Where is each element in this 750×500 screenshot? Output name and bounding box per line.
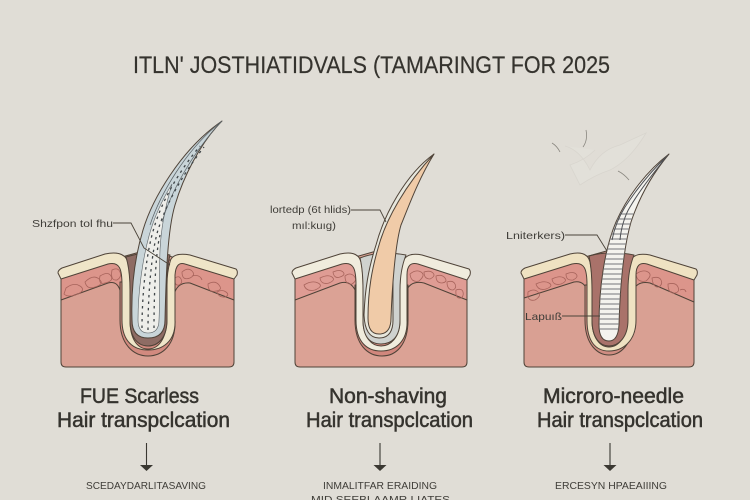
follicle outer ring: [355, 285, 408, 356]
follicle sheath and skin cap: [521, 253, 697, 351]
arrow: micro-needle: [604, 443, 616, 471]
heading: non-shaving: Hair transpclcation: [306, 409, 473, 432]
follicle outer ring: [120, 282, 175, 356]
label: non-shaving callout: [270, 204, 386, 232]
hair core with dots: [138, 121, 222, 333]
follicle sheath and skin cap: [58, 253, 237, 350]
label: upper callout: Lniterkers): [506, 230, 565, 242]
label: non-shaving callout: mıl:kuıg): [292, 220, 336, 232]
hair shaft: [368, 154, 434, 334]
dermis band with cells: [61, 260, 234, 300]
panel: micro-needle diagram: [506, 130, 697, 367]
label: lower callout: Lapuıß: [525, 311, 562, 323]
heading: FUE: Hair transpclcation: [57, 409, 230, 432]
label: FUE callout: Shzfpon tol fhu: [32, 218, 113, 230]
heading: non-shaving: [306, 385, 473, 432]
hair shaft: [599, 154, 669, 341]
skin block: [524, 250, 694, 367]
faint sketch: [552, 130, 646, 185]
text: non-shaving benefit: INMALITFAR ERAIDING: [323, 480, 437, 492]
panel: non-shaving diagram: [270, 154, 470, 367]
heading: non-shaving: Non-shaving: [329, 385, 447, 408]
follicle interior: [589, 253, 634, 346]
label: lower callout: [525, 311, 600, 323]
label: upper callout: [506, 230, 607, 251]
dermis band with cells: [524, 260, 694, 302]
label: non-shaving callout: lortedp (6t hlids): [270, 204, 351, 216]
arrow: FUE: [140, 443, 153, 471]
arrow: non-shaving: [374, 443, 386, 471]
dermis band with cells: [295, 260, 467, 300]
heading: FUE: [57, 385, 230, 432]
title: ITLN' JOSTHIATIDVALS (TAMARINGT FOR 2025: [133, 52, 610, 79]
follicle interior: [126, 253, 170, 346]
heading: FUE: FUE Scarless: [80, 385, 199, 408]
text: micro-needle benefit: ERCESYN HPAEAIIING: [555, 480, 667, 492]
heading: micro-needle: Microro-needle: [543, 385, 684, 408]
follicle sheath and skin cap: [292, 253, 470, 351]
hair shaft: [132, 121, 222, 338]
text: non-shaving benefit: [311, 480, 450, 500]
follicle outer ring: [585, 285, 633, 355]
text: FUE benefit: SCEDAYDARLITASAVING: [86, 480, 206, 492]
heading: micro-needle: [537, 385, 703, 432]
panel: FUE diagram: [32, 121, 237, 367]
follicle interior: [360, 253, 406, 344]
hair stripes: [595, 154, 669, 329]
label: FUE callout: [32, 218, 170, 265]
skin block: [295, 250, 467, 367]
heading: micro-needle: Hair transpclcation: [537, 409, 703, 432]
skin block: [61, 250, 234, 367]
hair sheath: [364, 154, 434, 338]
